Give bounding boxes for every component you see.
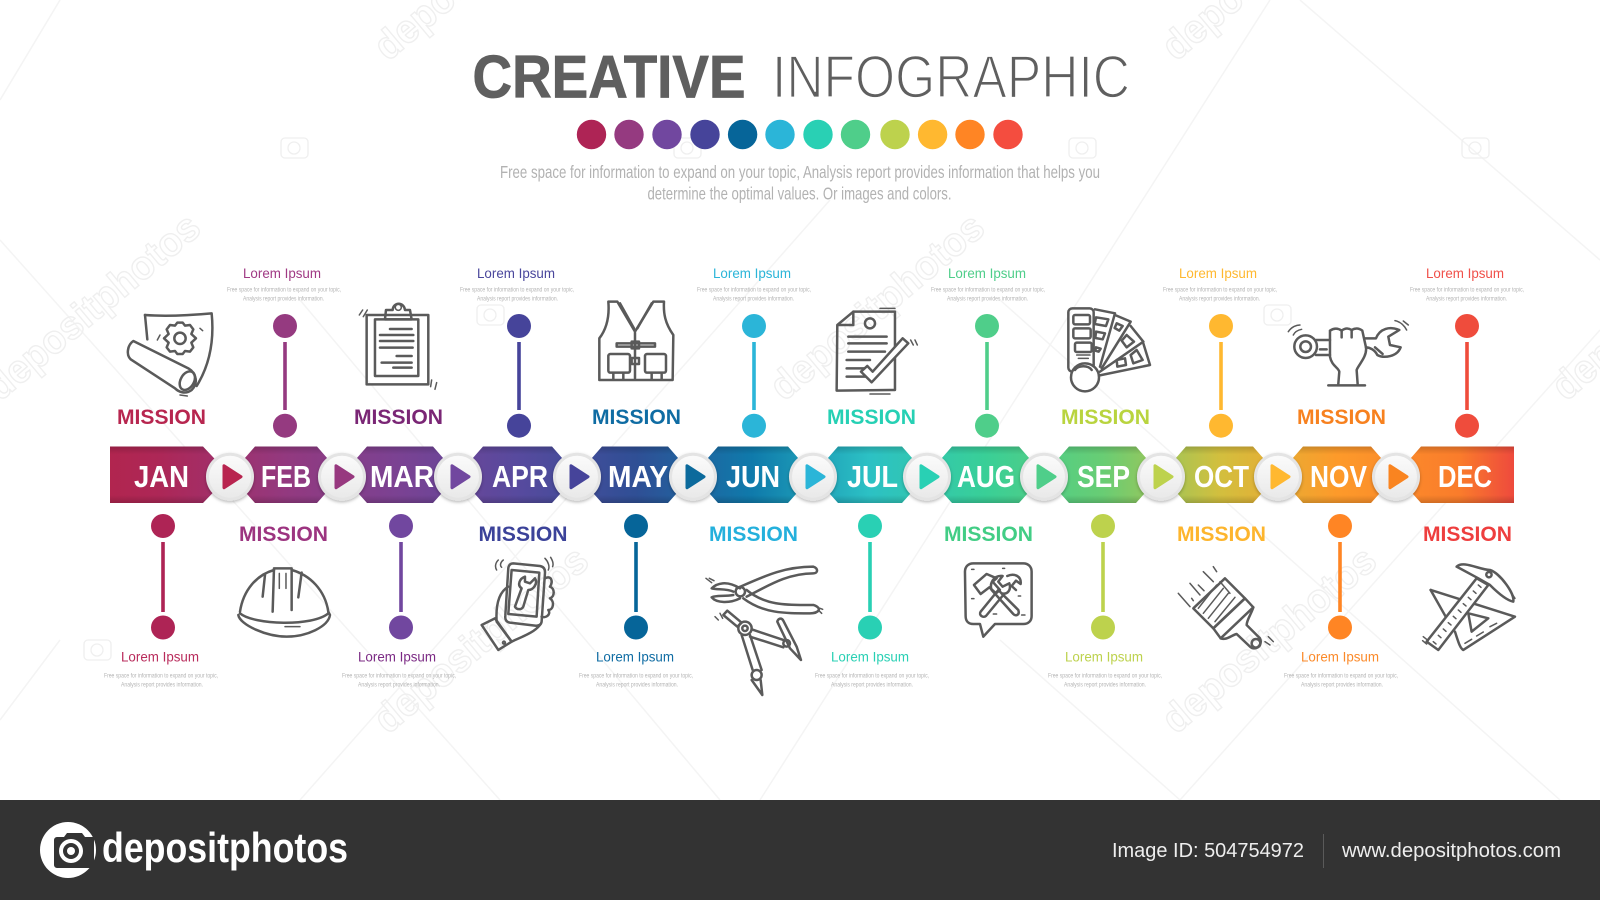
captions below band: Free space for information to expand on your topic, — [815, 672, 929, 680]
watermark text: depositphotos — [366, 538, 597, 742]
captions above band: Free space for information to expand on your topic, — [697, 286, 811, 294]
mission labels above band — [117, 405, 1386, 429]
icon: pliers and compass — [706, 567, 823, 695]
captions below band: Free space for information to expand on your topic, — [1048, 672, 1162, 680]
captions above band — [227, 266, 1524, 302]
mission labels above band: MISSION — [354, 405, 443, 429]
month labels: SEP — [1077, 459, 1130, 494]
intro text: Free space for information to expand on your topic, Analysis report provides information that helps you — [500, 162, 1100, 182]
image id: Image ID: 504754972 — [1112, 840, 1304, 862]
captions above band: Lorem Ipsum — [713, 266, 791, 281]
footer divider — [1323, 834, 1324, 868]
mission labels above band: MISSION — [1297, 405, 1386, 429]
mission labels below band: MISSION — [239, 522, 328, 546]
captions above band: Lorem Ipsum — [243, 266, 321, 281]
captions above band: Free space for information to expand on your topic, — [931, 286, 1045, 294]
captions below band: Lorem Ipsum — [596, 650, 674, 664]
play buttons — [206, 453, 1420, 501]
month labels: NOV — [1310, 459, 1367, 494]
captions above band: Lorem Ipsum — [1179, 266, 1257, 281]
captions above band: Lorem Ipsum — [477, 266, 555, 281]
icon: tools speech bubble — [965, 563, 1032, 637]
title: INFOGRAPHIC — [772, 44, 1130, 110]
captions above band: Analysis report provides information. — [1179, 296, 1260, 302]
watermark camera marks — [84, 138, 1489, 660]
month labels: MAY — [608, 459, 668, 494]
captions below band — [104, 650, 1398, 688]
icon: paint brush — [1178, 567, 1273, 648]
captions below band: Lorem Ipsum — [831, 650, 909, 664]
captions below band: Analysis report provides information. — [831, 682, 913, 688]
mission labels below band: MISSION — [944, 522, 1033, 546]
captions below band: Lorem Ipsum — [358, 650, 436, 664]
mission labels below band: MISSION — [478, 522, 568, 546]
icon: set square and ruler — [1423, 564, 1515, 650]
icon: blueprint roll with gear — [128, 313, 212, 396]
captions below band: Analysis report provides information. — [1301, 682, 1383, 688]
title — [472, 44, 1130, 110]
captions below band: Lorem Ipsum — [121, 650, 199, 664]
website: www.depositphotos.com — [1341, 840, 1561, 862]
icon: signed document — [837, 308, 917, 394]
connectors above band — [273, 314, 1479, 438]
captions below band: Free space for information to expand on your topic, — [1284, 672, 1398, 680]
icon: hand holding phone — [482, 557, 554, 650]
mission labels below band: MISSION — [1177, 522, 1266, 546]
captions above band: Analysis report provides information. — [243, 296, 324, 302]
icon: hard hat — [238, 568, 330, 637]
icon: safety vest — [599, 302, 673, 380]
icon: colour swatch fan — [1068, 308, 1150, 391]
captions above band: Free space for information to expand on your topic, — [227, 286, 341, 294]
captions below band: Analysis report provides information. — [1064, 682, 1146, 688]
captions below band: Analysis report provides information. — [358, 682, 440, 688]
month labels: JUL — [847, 459, 898, 494]
depositphotos logo — [40, 822, 348, 878]
icon: fist with wrench — [1288, 321, 1408, 385]
intro text: determine the optimal values. Or images and colors. — [648, 184, 952, 204]
mission labels below band — [239, 522, 1512, 546]
captions below band: Analysis report provides information. — [121, 682, 203, 688]
captions above band: Free space for information to expand on your topic, — [1163, 286, 1277, 294]
captions below band: Free space for information to expand on your topic, — [579, 672, 693, 680]
captions above band: Free space for information to expand on your topic, — [1410, 286, 1524, 294]
month labels: AUG — [957, 459, 1015, 494]
depositphotos logo: depositphotos — [102, 824, 348, 871]
watermark text: depositphotos — [1154, 538, 1385, 742]
mission labels below band: MISSION — [1423, 522, 1512, 546]
mission labels above band: MISSION — [1061, 405, 1150, 429]
captions above band: Analysis report provides information. — [477, 296, 558, 302]
captions above band: Analysis report provides information. — [713, 296, 794, 302]
month labels: MAR — [370, 459, 434, 494]
captions below band: Free space for information to expand on your topic, — [104, 672, 218, 680]
connectors below band — [151, 514, 1352, 640]
captions above band: Free space for information to expand on your topic, — [460, 286, 574, 294]
captions below band: Analysis report provides information. — [596, 682, 678, 688]
month labels: FEB — [261, 459, 311, 494]
month labels: DEC — [1438, 459, 1492, 494]
watermark text: depositphotos — [762, 205, 993, 409]
month labels: JUN — [726, 459, 780, 494]
month labels: JAN — [134, 459, 189, 494]
mission labels below band: MISSION — [709, 522, 798, 546]
mission labels above band: MISSION — [117, 405, 206, 429]
mission labels above band: MISSION — [592, 405, 681, 429]
month labels: APR — [492, 459, 548, 494]
captions below band: Free space for information to expand on your topic, — [342, 672, 456, 680]
title: CREATIVE — [472, 44, 746, 110]
month labels: OCT — [1194, 459, 1249, 494]
month labels — [134, 459, 1492, 494]
icon: clipboard — [359, 304, 437, 389]
captions above band: Analysis report provides information. — [947, 296, 1028, 302]
captions above band: Lorem Ipsum — [948, 266, 1026, 281]
footer bar — [0, 800, 1600, 900]
timeline band — [110, 446, 1514, 503]
colour dots row — [577, 120, 1023, 149]
intro text — [500, 162, 1100, 204]
mission labels above band: MISSION — [827, 405, 916, 429]
captions above band: Analysis report provides information. — [1426, 296, 1507, 302]
captions above band: Lorem Ipsum — [1426, 266, 1504, 281]
captions below band: Lorem Ipsum — [1301, 650, 1379, 664]
captions below band: Lorem Ipsum — [1065, 650, 1143, 664]
